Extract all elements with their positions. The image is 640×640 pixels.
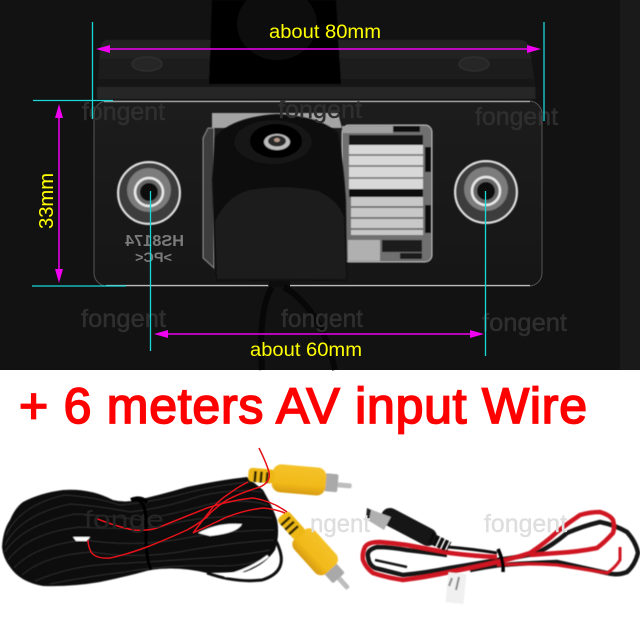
camera body — [212, 114, 347, 281]
watermarks: dark photo: fongent — [278, 96, 362, 124]
cable tie — [134, 499, 151, 570]
moulded part number: >PC< — [135, 249, 172, 265]
DC plug barrel — [366, 508, 391, 530]
dimension: about 60mm — [150, 191, 486, 361]
cable: DC power lead — [363, 508, 638, 604]
moulded part number: HS8174 — [125, 233, 184, 250]
coil gaps — [73, 524, 242, 541]
watermarks: dark photo: fongent — [475, 103, 558, 131]
watermarks: dark photo: fongent — [81, 305, 166, 333]
loose loop — [207, 538, 281, 581]
red trigger wires — [88, 448, 287, 558]
cable tie — [498, 549, 503, 572]
camera bezel — [203, 113, 342, 268]
moulded part number — [125, 233, 184, 265]
dimension: 33mm: 33mm — [36, 173, 58, 229]
watermark: on coil: fonge — [84, 506, 164, 534]
watermarks: white area — [310, 510, 567, 538]
panel: license plate light housing — [94, 101, 542, 287]
notch for wire — [269, 281, 290, 287]
camera lens — [234, 120, 312, 164]
watermarks: white area: ngent — [310, 510, 370, 538]
wire tag — [445, 572, 467, 604]
coil strands — [5, 482, 275, 584]
dimension: 33mm — [32, 100, 126, 286]
watermarks: white area: fongent — [484, 510, 567, 538]
watermarks: dark photo: fongent — [281, 305, 363, 333]
dimension: about 80mm — [92, 22, 544, 121]
DC plug strain relief — [430, 538, 449, 547]
ghost reflection of plate — [97, 0, 536, 99]
watermarks: dark photo: fongent — [482, 309, 567, 337]
mounting hole: right — [455, 161, 517, 223]
panel: product photo background — [0, 0, 640, 370]
dimension: about 60mm: about 60mm — [250, 340, 362, 361]
heading: + 6 meters AV input Wire — [19, 378, 587, 434]
wire to plug — [448, 547, 497, 553]
connector: lower RCA plug — [272, 506, 359, 598]
camera wire — [261, 287, 335, 370]
DC plug body — [390, 517, 428, 537]
watermarks: dark photo — [81, 96, 567, 337]
mounting hole: left — [118, 162, 180, 224]
connector: upper RCA plug — [247, 462, 353, 498]
watermarks: dark photo: fongent — [82, 98, 165, 126]
dimension: about 80mm: about 80mm — [269, 22, 381, 43]
lead red strand — [363, 512, 614, 580]
cable: coiled AV wire — [2, 477, 281, 586]
lead black strand — [368, 522, 638, 575]
lamp module — [342, 125, 432, 262]
